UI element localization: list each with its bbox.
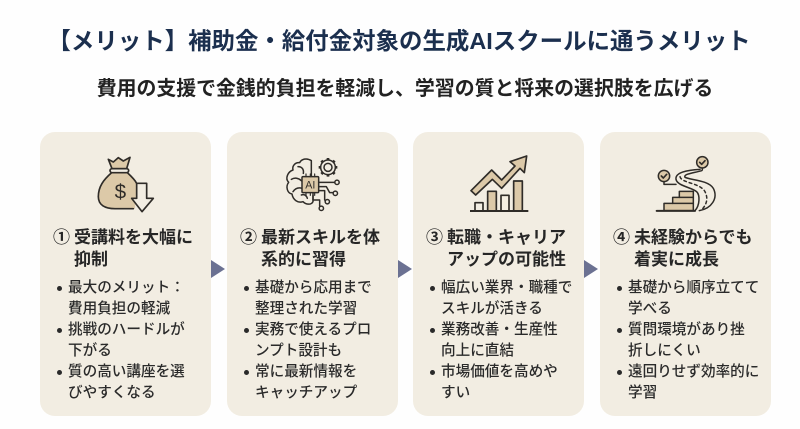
bullet list: すい bbox=[441, 385, 470, 401]
bullet list: 学べる bbox=[628, 301, 672, 317]
panel: card 2 skills bbox=[227, 132, 398, 416]
icon: money bag with down arrow: $ bbox=[115, 181, 127, 204]
bullet list: 実務で使えるプロ bbox=[255, 322, 371, 338]
bullet list bbox=[57, 279, 185, 401]
bullet list: 基礎から応用まで bbox=[255, 280, 372, 296]
bullet list: 幅広い業界・職種で bbox=[441, 280, 572, 296]
icon: AI brain with gear bbox=[286, 158, 340, 212]
heading: 着実に成長 bbox=[634, 250, 719, 269]
heading bbox=[240, 228, 380, 269]
heading bbox=[53, 228, 193, 269]
bullet list: 挑戦のハードルが bbox=[68, 322, 185, 338]
bullet list: 折しにくい bbox=[628, 343, 701, 359]
bullet list: 質の高い講座を選 bbox=[68, 364, 185, 380]
heading: ② bbox=[240, 228, 257, 247]
bullet list: 質問環境があり挫 bbox=[628, 322, 745, 338]
bullet list bbox=[430, 279, 572, 401]
bullet list: びやすくなる bbox=[68, 385, 156, 401]
heading: ③ bbox=[426, 228, 443, 247]
bullet list bbox=[244, 279, 372, 401]
subtitle: 費用の支援で金銭的負担を軽減し、学習の質と将来の選択肢を広げる bbox=[97, 78, 713, 100]
heading: 抑制 bbox=[74, 250, 108, 269]
heading bbox=[613, 228, 752, 269]
bullet list: 市場価値を高めや bbox=[441, 364, 558, 380]
heading: 系的に習得 bbox=[261, 250, 346, 269]
heading: 転職・キャリア bbox=[447, 228, 566, 247]
heading: 受講料を大幅に bbox=[74, 228, 193, 247]
heading: アップの可能性 bbox=[447, 250, 566, 269]
bullet list: 基礎から順序立てて bbox=[628, 280, 759, 296]
bullet list: ンプト設計も bbox=[255, 343, 342, 359]
bullet list: 業務改善・生産性 bbox=[441, 322, 558, 338]
arrow bbox=[398, 260, 412, 278]
icon: money bag with down arrow bbox=[98, 156, 154, 212]
bullet list: 向上に直結 bbox=[441, 343, 514, 359]
icon: rising bar chart with arrow bbox=[470, 155, 528, 212]
title: 【メリット】補助金・給付金対象の生成AIスクールに通うメリット bbox=[47, 28, 751, 54]
icon: stairs and winding road bbox=[656, 156, 716, 212]
panel: card 4 growth bbox=[600, 132, 771, 416]
bullet list: 整理された学習 bbox=[255, 301, 357, 317]
bullet list: 最大のメリット： bbox=[68, 280, 185, 296]
heading: 最新スキルを体 bbox=[261, 228, 380, 247]
icon: AI brain with gear: AI bbox=[305, 179, 315, 191]
bullet list: 遠回りせず効率的に bbox=[628, 364, 759, 380]
bullet list: 常に最新情報を bbox=[255, 364, 357, 380]
panel: card 1 tuition bbox=[40, 132, 211, 416]
arrow bbox=[211, 260, 225, 278]
panel: card 3 career bbox=[413, 132, 584, 416]
bullet list: 学習 bbox=[628, 385, 657, 401]
bullet list: 費用負担の軽減 bbox=[68, 301, 170, 317]
arrow bbox=[584, 260, 598, 278]
heading: ④ bbox=[613, 228, 630, 247]
bullet list: スキルが活きる bbox=[441, 301, 543, 317]
bullet list: 下がる bbox=[68, 343, 112, 359]
heading bbox=[426, 228, 566, 269]
heading: ① bbox=[53, 228, 70, 247]
bullet list bbox=[617, 279, 759, 401]
heading: 未経験からでも bbox=[634, 228, 752, 247]
bullet list: キャッチアップ bbox=[255, 385, 357, 401]
